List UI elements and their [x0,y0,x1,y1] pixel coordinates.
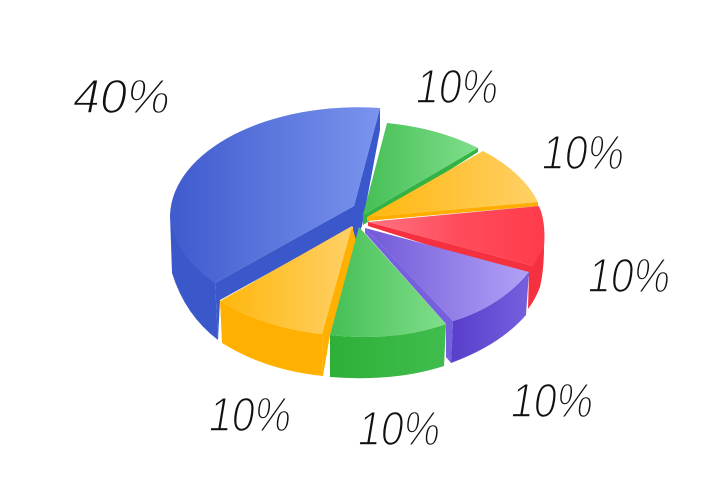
slice: green 10% top [363,123,478,225]
label: 10% upper right: 10% [542,127,624,180]
label: 10% lower left: 10% [209,389,291,442]
slice: yellow 10% upper right [367,151,538,221]
slice: yellow 10% lower left [220,226,356,376]
slice: purple 10% [365,228,529,363]
label: 40%: 40% [73,71,170,124]
label: 10% right: 10% [588,250,670,303]
slice: red 10% [368,206,544,309]
slice: blue 40% [170,107,380,340]
slice: green 10% bottom [330,227,446,378]
label: 10% top: 10% [416,61,498,114]
label: 10% bottom: 10% [358,403,440,456]
label: 10% lower right: 10% [511,375,593,428]
